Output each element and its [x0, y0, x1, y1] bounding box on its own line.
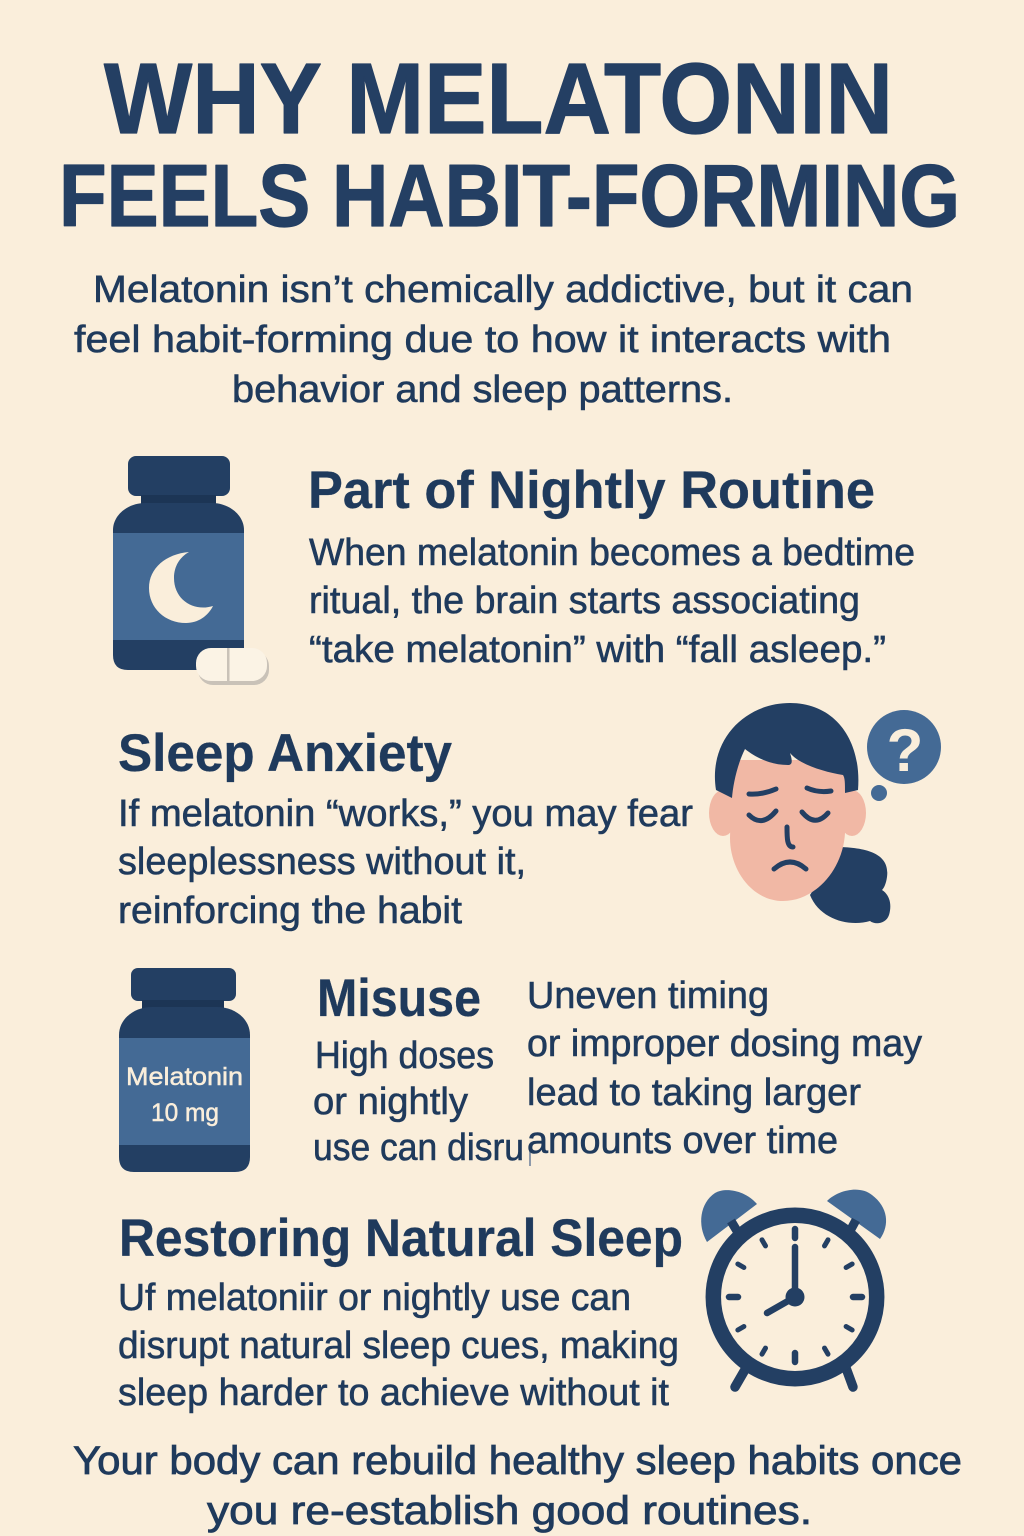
icon: alarm clock	[701, 1190, 886, 1387]
section: sleep anxiety: Sleep Anxiety	[118, 724, 452, 783]
section: sleep anxiety	[118, 724, 693, 932]
section: misuse	[313, 969, 922, 1169]
icon: capsule pill	[196, 648, 269, 685]
icon: melatonin bottle with moon	[113, 456, 269, 685]
section: misuse: Uneven timing	[527, 975, 769, 1017]
section: restoring natural sleep: Uf melatoniir or nightly use can	[118, 1277, 631, 1319]
section: restoring natural sleep: disrupt natural sleep cues, making	[118, 1325, 679, 1367]
section: restoring natural sleep: Restoring Natural Sleep	[119, 1209, 683, 1268]
icon: worried face with question bubble: ?	[887, 717, 923, 784]
footer message: Your body can rebuild healthy sleep habits once	[73, 1439, 962, 1483]
section: misuse: amounts over time	[527, 1120, 838, 1162]
intro text	[74, 269, 913, 411]
section: restoring natural sleep	[118, 1209, 683, 1414]
footer message: you re-establish good routines.	[207, 1489, 812, 1533]
section: part of nightly routine	[308, 461, 915, 671]
icon: melatonin 10 mg bottle	[119, 968, 250, 1172]
section: misuse: lead to taking larger	[527, 1072, 861, 1114]
footer message	[73, 1439, 962, 1533]
icon: worried face with question bubble	[709, 703, 941, 923]
intro text: Melatonin isn’t chemically addictive, but it can	[93, 269, 913, 311]
title: WHY MELATONIN	[104, 43, 893, 155]
intro text: behavior and sleep patterns.	[232, 369, 733, 411]
section: part of nightly routine: When melatonin becomes a bedtime	[309, 532, 915, 574]
section: misuse: Misuse	[317, 969, 481, 1028]
section: sleep anxiety: sleeplessness without it,	[118, 841, 526, 883]
intro text: feel habit-forming due to how it interacts with	[74, 319, 891, 361]
section: sleep anxiety: reinforcing the habit	[118, 890, 462, 932]
section: misuse: or nightly	[313, 1081, 468, 1123]
section: restoring natural sleep: sleep harder to achieve without it	[118, 1372, 669, 1414]
section: misuse: use can disru	[313, 1127, 524, 1169]
section: sleep anxiety: If melatonin “works,” you may fear	[118, 793, 693, 835]
section: misuse: High doses	[315, 1035, 494, 1077]
section: part of nightly routine: Part of Nightly Routine	[308, 461, 875, 520]
section: part of nightly routine: ritual, the brain starts associating	[309, 580, 860, 622]
icon: melatonin 10 mg bottle: 10 mg	[151, 1099, 219, 1127]
icon: melatonin 10 mg bottle: Melatonin	[126, 1063, 243, 1091]
title	[59, 43, 960, 245]
section: part of nightly routine: “take melatonin” with “fall asleep.”	[309, 629, 886, 671]
section: misuse: or improper dosing may	[527, 1023, 922, 1065]
